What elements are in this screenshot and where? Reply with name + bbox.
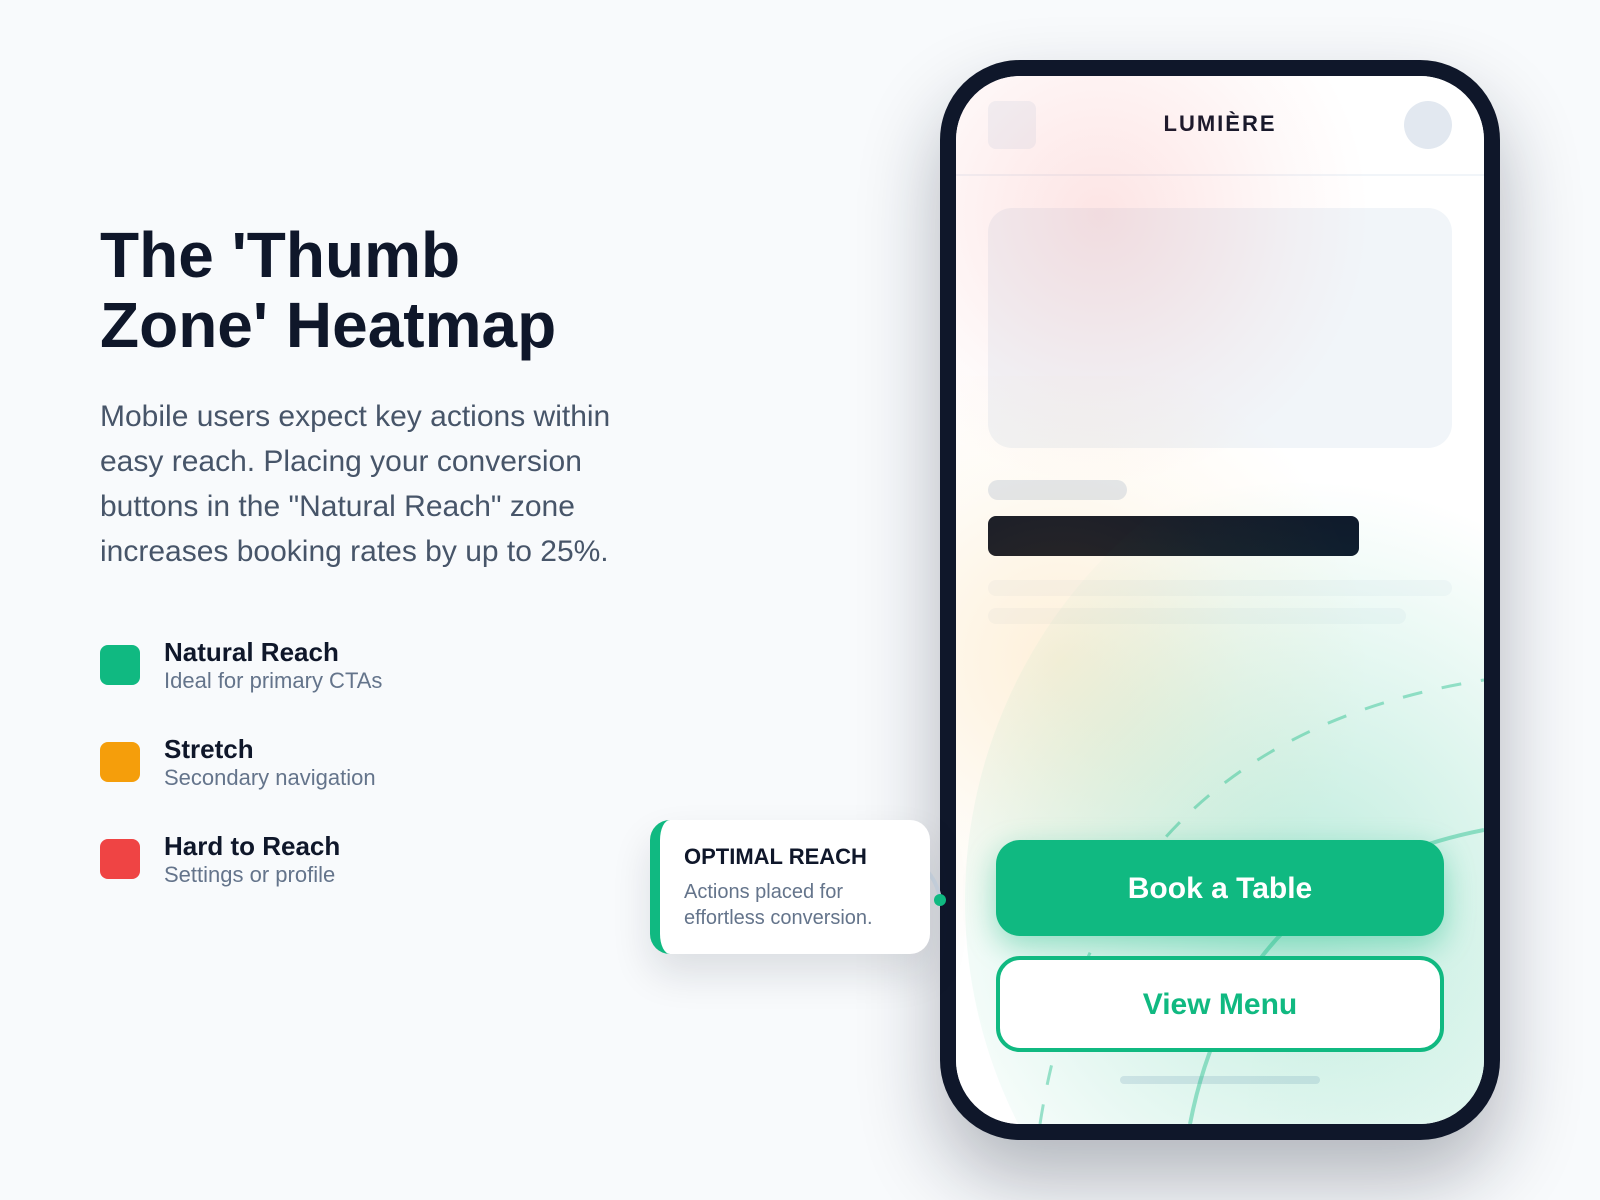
heat zone: stretch (orange): [956, 376, 1484, 976]
button: book a table: [996, 840, 1444, 936]
home indicator: [1120, 1076, 1320, 1084]
title: Zone' Heatmap: [100, 289, 556, 361]
brand name: LUMIÈRE: [1164, 111, 1276, 136]
legend item: stretch: Secondary navigation: [164, 765, 376, 790]
legend item: natural reach: Ideal for primary CTAs: [164, 668, 382, 693]
intro paragraph: increases booking rates by up to 25%.: [100, 535, 609, 568]
body line placeholder 1: [988, 580, 1452, 596]
body line placeholder 2: [988, 608, 1406, 624]
hero image placeholder: [988, 208, 1452, 448]
heatmap overlay: [956, 76, 1484, 1124]
callout description: [684, 881, 873, 929]
menu icon placeholder: [988, 101, 1036, 149]
legend item: hard to reach: Settings or profile: [164, 862, 335, 887]
app header: [956, 76, 1484, 176]
reach arcs: [1038, 678, 1484, 1124]
heading placeholder: [988, 516, 1359, 556]
intro paragraph: Mobile users expect key actions within: [100, 400, 610, 433]
callout description: effortless conversion.: [684, 907, 873, 929]
heat zone: natural reach (green): [965, 537, 1484, 1124]
title: The 'Thumb: [100, 219, 460, 291]
avatar placeholder: [1404, 101, 1452, 149]
button: view menu: View Menu: [1143, 988, 1297, 1021]
button: book a table: Book a Table: [1128, 872, 1312, 905]
legend item: stretch: [100, 734, 376, 790]
legend: [100, 637, 382, 887]
dashed arc: stretch boundary: [1040, 680, 1484, 1124]
intro paragraph: [100, 400, 610, 568]
phone mockup: [940, 60, 1500, 1140]
intro paragraph: buttons in the "Natural Reach" zone: [100, 490, 575, 523]
heat zone: hard to reach (red): [956, 76, 1484, 676]
heat zone: natural reach corner glow: [956, 76, 1484, 1124]
callout title: OPTIMAL REACH: [684, 844, 867, 869]
solid arc: natural reach boundary: [1190, 830, 1484, 1124]
intro paragraph: easy reach. Placing your conversion: [100, 445, 582, 478]
title: [100, 219, 556, 361]
callout: optimal reach: [650, 820, 930, 954]
callout description: Actions placed for: [684, 881, 843, 903]
legend item: natural reach: Natural Reach: [164, 637, 339, 667]
label placeholder: [988, 480, 1127, 500]
legend item: natural reach: [100, 637, 382, 693]
legend item: hard to reach: Hard to Reach: [164, 831, 340, 861]
connector dot: [934, 894, 946, 906]
connector curve: [930, 872, 941, 894]
legend item: stretch: Stretch: [164, 734, 254, 764]
button: view menu: [996, 956, 1444, 1052]
legend item: hard to reach: [100, 831, 340, 887]
